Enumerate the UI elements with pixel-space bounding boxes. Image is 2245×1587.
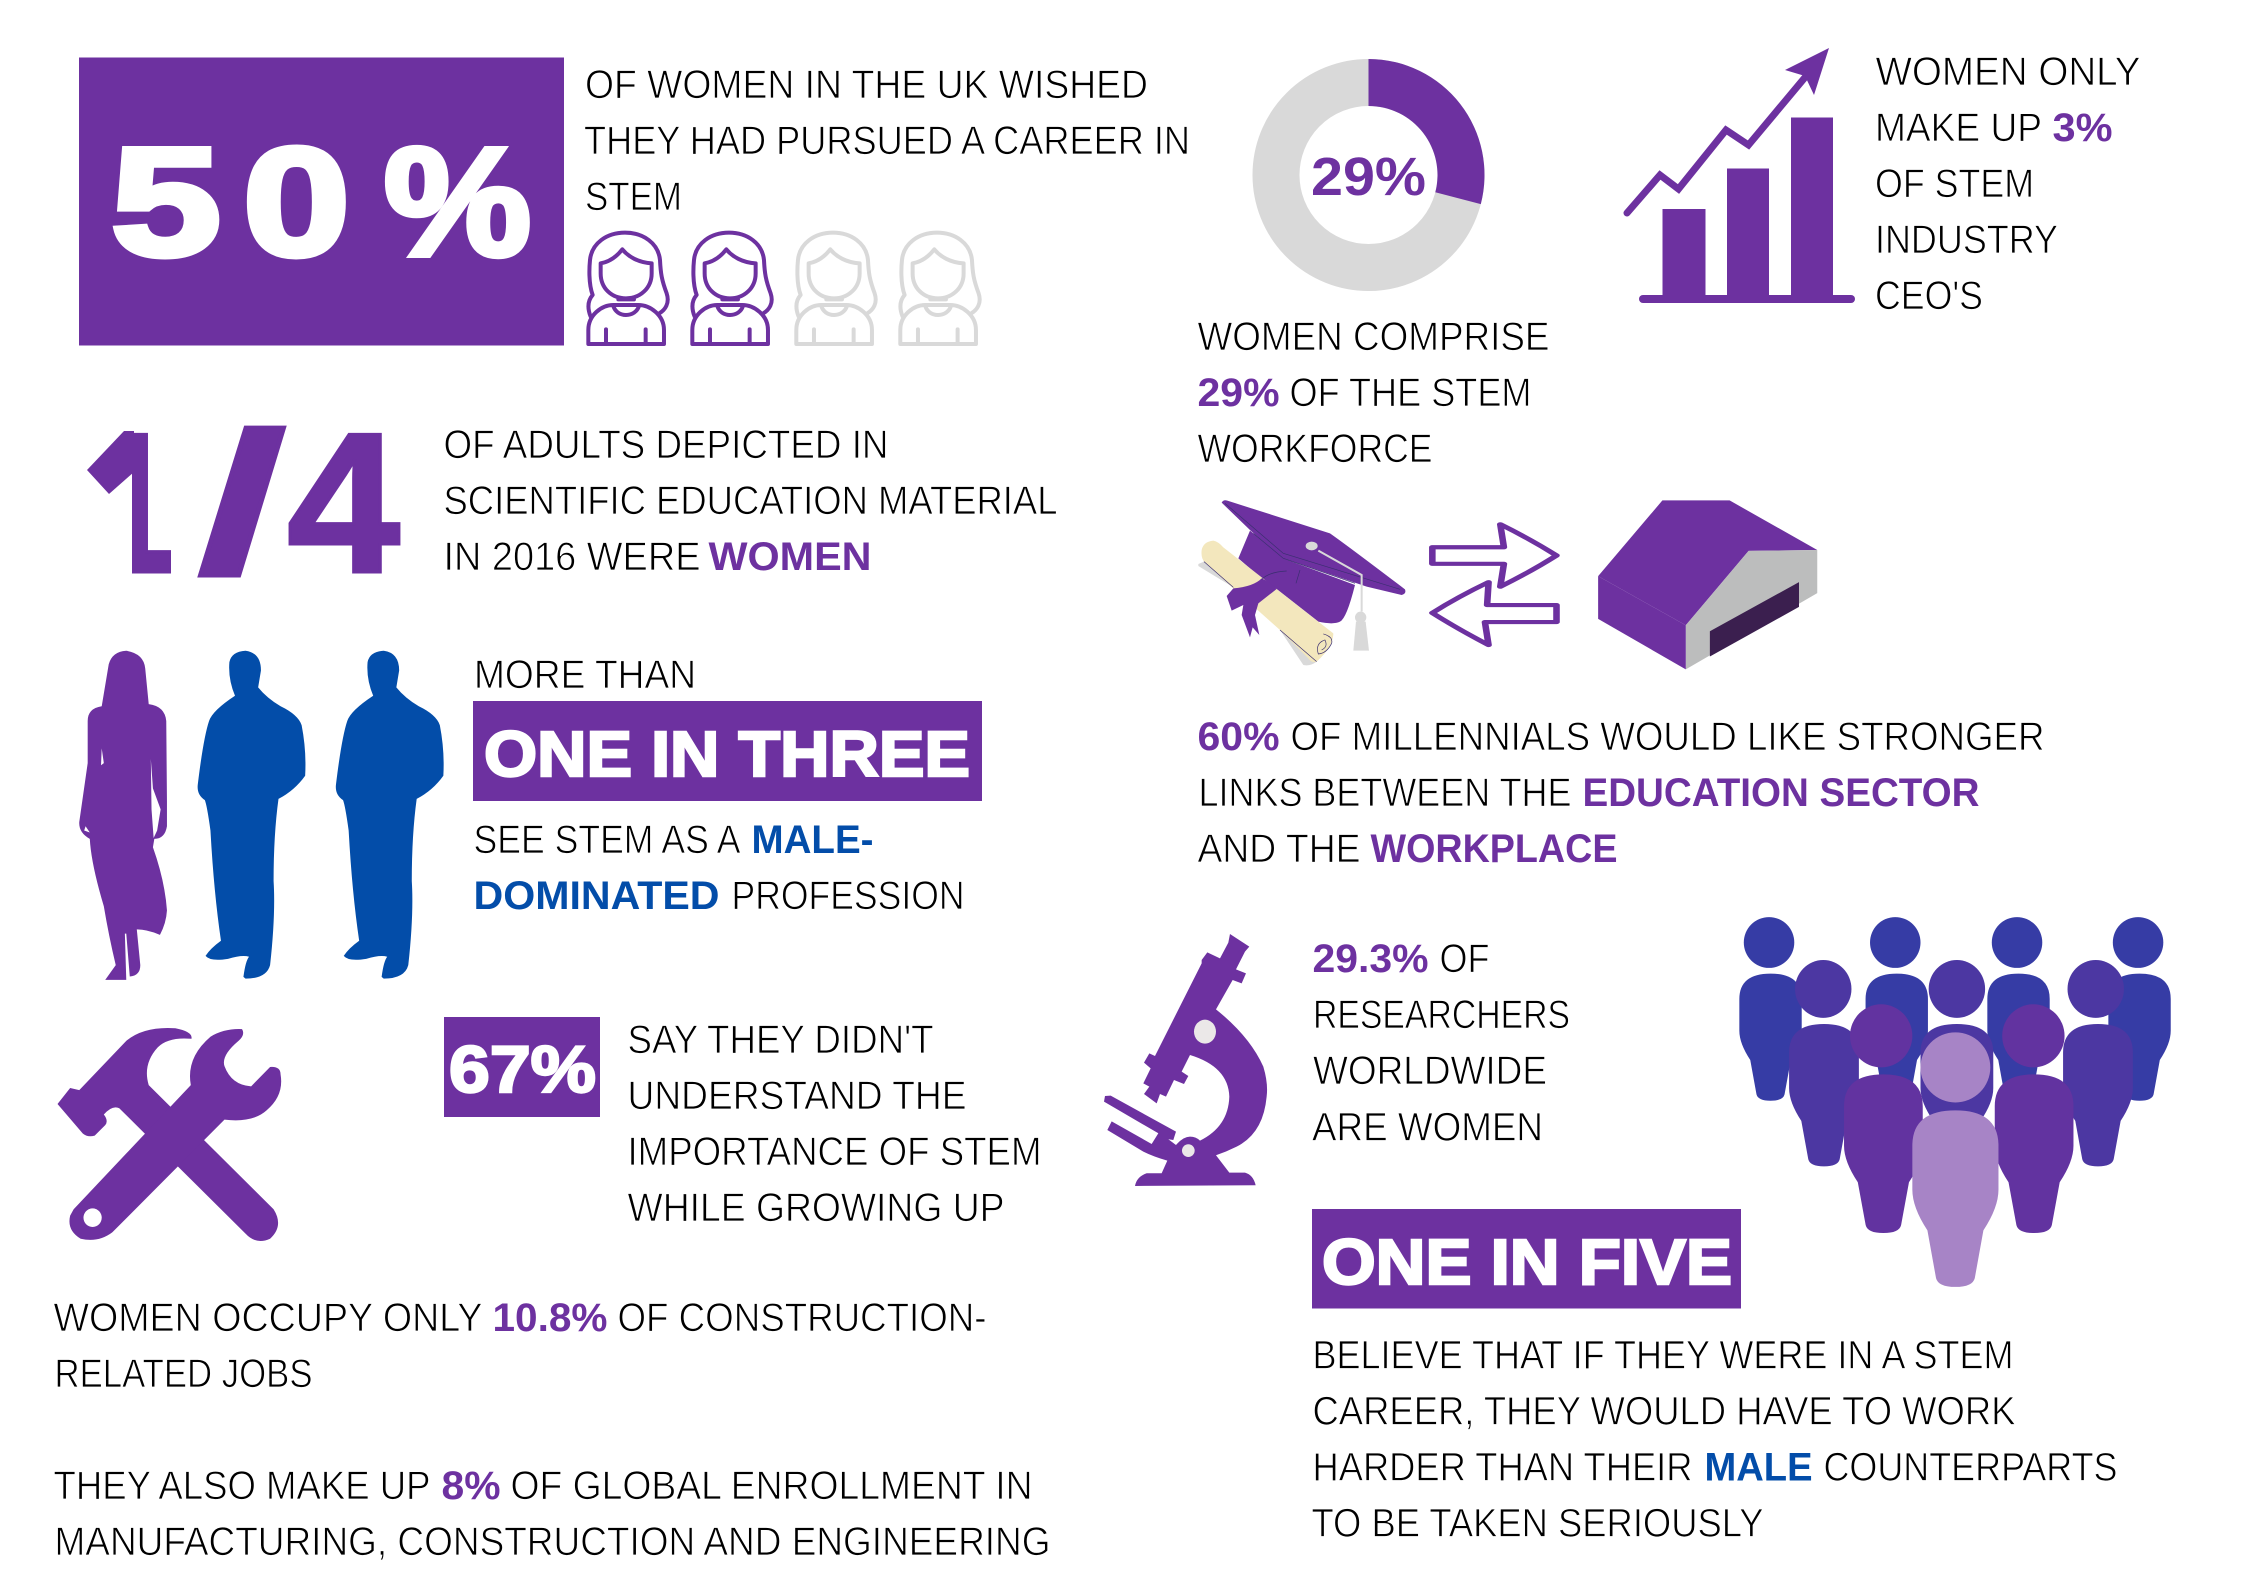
text: more than: MORE THAN — [474, 653, 696, 697]
text: work harder than male counterparts: HARDER THAN THEIR — [1312, 1446, 1692, 1490]
text: did not understand importance: IMPORTANCE OF STEM — [628, 1130, 1042, 1174]
banner: one in five — [1312, 1209, 1741, 1308]
text: women comprise 29%: 29% — [1198, 371, 1280, 415]
icon: microscope — [1104, 934, 1267, 1186]
text: 29.3% of researchers: 29.3% — [1312, 937, 1428, 981]
stat box: 50%: 0 — [243, 116, 350, 288]
text: did not understand importance: WHILE GROWING UP — [628, 1186, 1004, 1230]
stat box: 50% — [79, 58, 564, 346]
text: did not understand importance — [628, 1018, 1042, 1230]
text: male-dominated profession: SEE STEM AS A — [474, 818, 741, 862]
panel: education and workplace links — [1198, 500, 2044, 871]
donut chart: 29% — [1276, 59, 1485, 268]
text: women only 3% of CEOs: CEO'S — [1875, 274, 1983, 318]
icon: warehouse building — [1598, 500, 1817, 669]
text: education material: IN 2016 WERE — [444, 535, 700, 579]
text: male-dominated profession: MALE- — [752, 818, 874, 862]
panel: 3 percent of CEOs — [1627, 48, 2140, 318]
big number: 1/4: 4 — [287, 392, 400, 615]
text: wished for STEM career — [584, 63, 1190, 219]
text: 29.3% of researchers: RESEARCHERS — [1313, 993, 1570, 1037]
text: male-dominated profession: PROFESSION — [732, 874, 964, 918]
big number: 1/4: 1 — [80, 392, 180, 615]
icon: woman and two men silhouettes — [79, 651, 444, 980]
stat box: 50%: % — [384, 116, 531, 288]
text: work harder than male counterparts — [1312, 1334, 2118, 1546]
panel: researchers and one in five — [1104, 917, 2171, 1546]
text: 29.3% of researchers — [1312, 937, 1570, 1150]
text: 60% of millennials: WORKPLACE — [1370, 827, 1618, 871]
text: work harder than male counterparts: COUNTERPARTS — [1824, 1446, 2118, 1490]
text block: construction jobs and enrollment: OF GLOBAL ENROLLMENT IN — [510, 1464, 1032, 1508]
donut chart: 29%: 29% — [1311, 147, 1426, 207]
panel: 50 percent of UK women — [79, 58, 1190, 346]
text: male-dominated profession — [474, 818, 964, 918]
text block: construction jobs and enrollment: THEY ALSO MAKE UP — [54, 1464, 430, 1508]
text: 29.3% of researchers: ARE WOMEN — [1312, 1106, 1543, 1150]
text: male-dominated profession: DOMINATED — [474, 874, 720, 918]
text: education material — [444, 423, 1058, 579]
text: 60% of millennials: EDUCATION SECTOR — [1582, 771, 1980, 815]
big number: 1/4: / — [197, 392, 287, 615]
text: women only 3% of CEOs: OF STEM — [1875, 162, 2034, 206]
panel: 67 percent — [58, 1017, 1041, 1241]
stat box: 67%: 67% — [449, 1032, 596, 1106]
text: women comprise 29%: OF THE STEM — [1290, 371, 1532, 415]
banner: one in three — [473, 701, 982, 801]
banner: one in three: ONE IN THREE — [484, 718, 970, 790]
big number: 1/4 — [70, 392, 400, 615]
text: work harder than male counterparts: TO BE TAKEN SERIOUSLY — [1312, 1502, 1764, 1546]
text: 60% of millennials: OF MILLENNIALS WOULD LIKE STRONGER — [1290, 715, 2044, 759]
text: education material: OF ADULTS DEPICTED IN — [444, 423, 888, 467]
text block: construction jobs and enrollment: MANUFACTURING, CONSTRUCTION AND ENGINEERING — [54, 1520, 1050, 1564]
icon: crowd of people — [1739, 917, 2171, 1287]
icon: rising bar chart with arrow — [1627, 48, 1855, 303]
text: women only 3% of CEOs — [1875, 50, 2140, 318]
text: work harder than male counterparts: MALE — [1704, 1446, 1812, 1490]
text block: construction jobs and enrollment: OF CONSTRUCTION- — [618, 1296, 986, 1340]
stat box: 50%: 5 — [111, 116, 221, 288]
text: women only 3% of CEOs: INDUSTRY — [1875, 218, 2058, 262]
text: did not understand importance: SAY THEY DIDN'T — [628, 1018, 934, 1062]
text: wished for STEM career: STEM — [585, 175, 682, 219]
text: did not understand importance: UNDERSTAND THE — [628, 1074, 966, 1118]
text: women comprise 29% — [1198, 315, 1550, 471]
panel: one in three — [79, 651, 982, 980]
text: wished for STEM career: OF WOMEN IN THE UK WISHED — [585, 63, 1148, 107]
text: 60% of millennials: AND THE — [1198, 827, 1360, 871]
text block: construction jobs and enrollment: 10.8% — [492, 1296, 608, 1340]
text block: construction jobs and enrollment — [54, 1296, 1050, 1564]
text: 60% of millennials: 60% — [1198, 715, 1280, 759]
text block: construction jobs and enrollment: RELATED JOBS — [54, 1352, 312, 1396]
panel: 29 percent of workforce — [1198, 59, 1550, 471]
stat box: 67% — [444, 1017, 600, 1117]
text: women comprise 29%: WORKFORCE — [1198, 427, 1432, 471]
panel: one quarter of adults depicted — [70, 392, 1058, 615]
text: work harder than male counterparts: BELIEVE THAT IF THEY WERE IN A STEM — [1312, 1334, 2014, 1378]
icon: hammer and wrench — [58, 1028, 281, 1241]
text block: construction jobs and enrollment: 8% — [442, 1464, 500, 1508]
banner: one in five: ONE IN FIVE — [1322, 1226, 1732, 1298]
text: education material: WOMEN — [708, 535, 872, 579]
text: 60% of millennials — [1198, 715, 2044, 871]
text: education material: SCIENTIFIC EDUCATION MATERIAL — [444, 479, 1058, 523]
icon row: four women, two highlighted — [588, 233, 980, 344]
text: wished for STEM career: THEY HAD PURSUED A CAREER IN — [584, 119, 1190, 163]
text: women comprise 29%: WOMEN COMPRISE — [1198, 315, 1550, 359]
text: 60% of millennials: LINKS BETWEEN THE — [1198, 771, 1572, 815]
text: 29.3% of researchers: OF — [1440, 937, 1490, 981]
text: women only 3% of CEOs: 3% — [2052, 106, 2112, 150]
text: women only 3% of CEOs: MAKE UP — [1875, 106, 2042, 150]
icon: exchange arrows — [1432, 524, 1556, 645]
icon: graduation cap and diploma — [1198, 500, 1405, 665]
text: work harder than male counterparts: CAREER, THEY WOULD HAVE TO WORK — [1312, 1390, 2016, 1434]
text block: construction jobs and enrollment: WOMEN OCCUPY ONLY — [54, 1296, 482, 1340]
text: women only 3% of CEOs: WOMEN ONLY — [1876, 50, 2140, 94]
text: 29.3% of researchers: WORLDWIDE — [1313, 1049, 1547, 1093]
